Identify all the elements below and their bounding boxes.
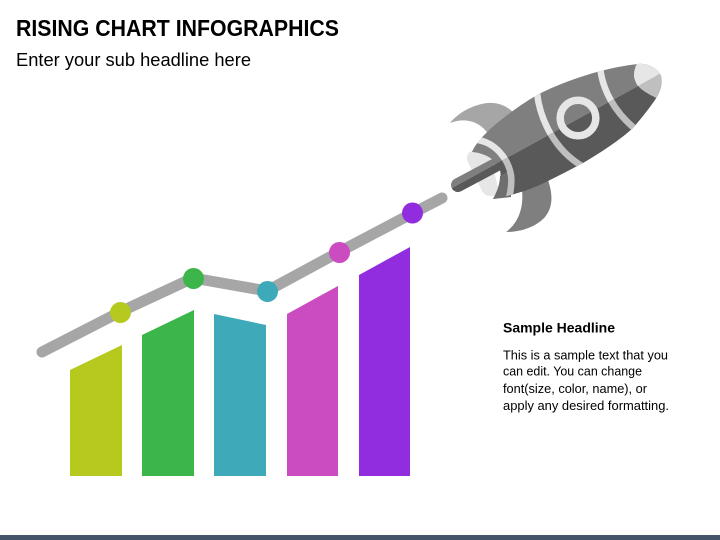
icon: rocket	[450, 64, 662, 232]
rocket bands	[478, 66, 634, 198]
sample body text: apply any desired formatting.	[503, 399, 669, 413]
sample body text	[503, 348, 669, 413]
marker: teal	[257, 281, 278, 302]
bar: pink	[287, 286, 338, 476]
rocket top fin	[450, 103, 514, 134]
sample body text: This is a sample text that you	[503, 348, 668, 362]
marker: green	[183, 268, 204, 289]
rocket nozzle lower half	[458, 160, 505, 185]
sample body text: can edit. You can change	[503, 364, 642, 378]
rocket bottom fin	[506, 180, 551, 232]
bands upper	[478, 70, 614, 160]
title: RISING CHART INFOGRAPHICS	[16, 15, 339, 41]
subtitle: Enter your sub headline here	[16, 49, 251, 70]
bar: teal	[214, 314, 266, 476]
bar: green	[142, 310, 194, 476]
marker: lime	[110, 302, 131, 323]
footer bar	[0, 535, 720, 540]
rocket exhaust panel	[467, 151, 500, 196]
bar: lime	[70, 345, 122, 476]
marker: purple	[402, 202, 423, 224]
rocket nozzle upper half	[458, 160, 505, 185]
bar chart	[70, 247, 410, 476]
rocket porthole	[560, 100, 596, 136]
sample headline: Sample Headline	[503, 320, 616, 336]
text block: sample headline	[503, 320, 669, 413]
marker: pink	[329, 242, 350, 263]
sample body text: font(size, color, name), or	[503, 382, 647, 396]
rocket tail shade	[493, 170, 511, 199]
rocket nose cone	[634, 64, 662, 98]
bar: purple	[359, 247, 410, 476]
bands lower	[502, 100, 636, 196]
trend line	[42, 198, 442, 352]
rising line chart	[42, 198, 442, 352]
rocket body lower half	[493, 74, 662, 199]
rocket body upper half	[472, 64, 660, 164]
